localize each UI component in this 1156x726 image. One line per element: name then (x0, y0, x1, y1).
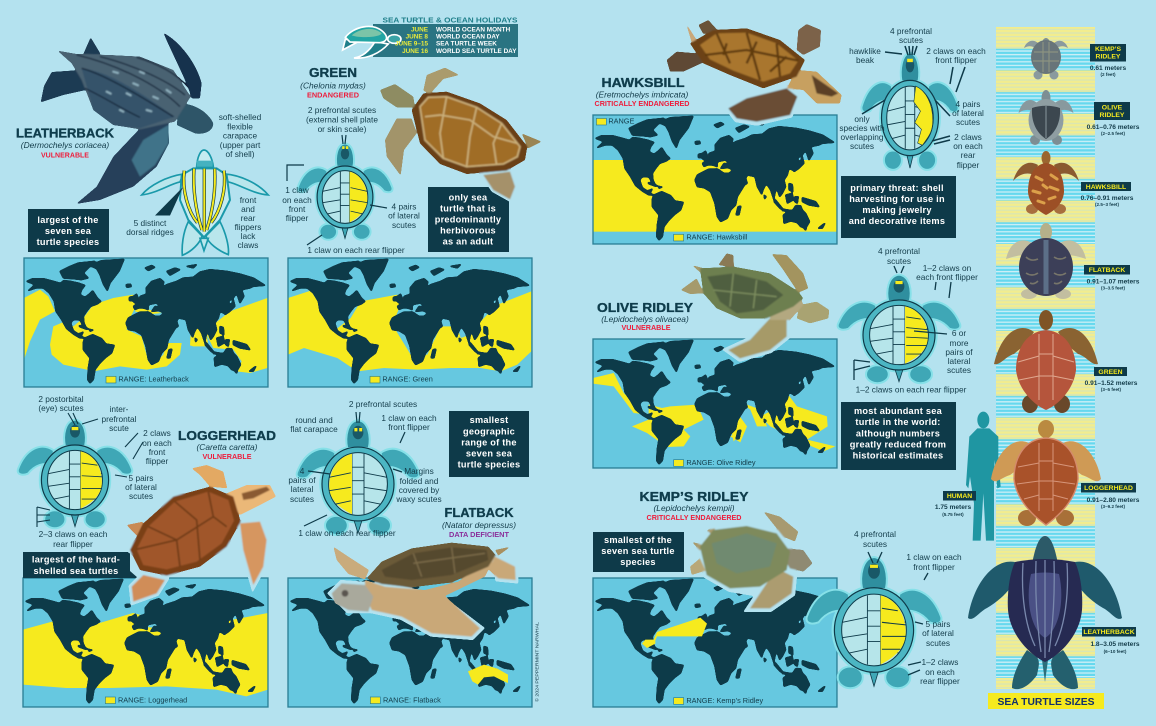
olive ridley range map: RANGE: Olive Ridley (686, 458, 756, 467)
hawksbill range map (593, 115, 837, 244)
dorsal ridges label: 5 distinct (134, 218, 167, 228)
lateral label: 4 pairs (956, 99, 980, 109)
overlapping scutes label: scutes (850, 141, 874, 151)
green anatomy diagram (297, 143, 393, 240)
loggerhead anatomy diagram (18, 420, 132, 528)
loggerhead turtle illustration (127, 465, 276, 602)
panel: green (282, 65, 542, 387)
olive ridley callout: although numbers (856, 428, 940, 438)
holidays title: SEA TURTLE & OCEAN HOLIDAYS (382, 16, 518, 24)
hawksbill range map: RANGE (608, 117, 635, 126)
panel: loggerhead (18, 394, 276, 707)
olive ridley turtle illustration (681, 253, 829, 358)
kemp's ridley range map (593, 578, 837, 707)
green callout: herbivorous (440, 226, 496, 236)
kemp's ridley turtle illustration (690, 512, 813, 608)
green heading: GREEN (309, 65, 357, 80)
front claw label: flipper (286, 213, 309, 223)
label: hawksbill: HAWKSBILL (1086, 184, 1126, 191)
panel: flatback (288, 399, 540, 707)
front claw label: 1 claw (285, 185, 310, 195)
flippers lack claws label: and (241, 204, 255, 214)
label: olive ridley: RIDLEY (1100, 112, 1125, 119)
olive ridley heading: OLIVE RIDLEY (597, 300, 693, 315)
label: leatherback: 1.8–3.05 meters (1090, 641, 1140, 648)
overlapping scutes label: species with (839, 123, 885, 133)
kemp's ridley anatomy diagram (807, 557, 941, 688)
label: olive ridley: OLIVE (1102, 104, 1123, 112)
olive ridley callout (841, 402, 956, 470)
flatback callout: turtle species (458, 460, 520, 470)
leatherback callout: largest of the (37, 215, 99, 225)
rear claws label: 2 claws (954, 132, 982, 142)
rear claws label: on each (953, 141, 983, 151)
green callout (428, 187, 509, 252)
flatback range map: RANGE: Flatback (383, 695, 441, 704)
hawksbill range map: RANGE: Hawksbill (686, 233, 748, 242)
green species name: (Chelonia mydas) (300, 80, 366, 90)
striped size scale (996, 27, 1095, 689)
front claw label: front flipper (913, 562, 955, 572)
size: hawksbill turtle (1013, 151, 1079, 215)
dorsal ridges label: dorsal ridges (126, 227, 174, 237)
prefrontal label: 4 prefrontal (878, 246, 920, 256)
loggerhead species name: (Caretta caretta) (197, 442, 258, 452)
size: kemp's ridley turtle (1024, 38, 1068, 80)
green callout: only sea (449, 192, 488, 202)
hawksbill anatomy diagram (861, 53, 959, 170)
label: kemp's ridley: 0.61 meters (1090, 65, 1126, 72)
hawksbill turtle illustration (667, 20, 842, 123)
postorbital scutes label: 2 postorbital (38, 394, 84, 404)
lateral scutes label: scutes (392, 220, 416, 230)
loggerhead range map: RANGE: Loggerhead (118, 695, 187, 704)
lateral label: 6 or (952, 328, 966, 338)
leatherback heading: LEATHERBACK (16, 126, 115, 140)
hawksbill callout (841, 176, 956, 238)
hawksbill species name: (Eretmochelys imbricata) (596, 90, 689, 100)
size: olive ridley turtle (1018, 90, 1074, 145)
label: loggerhead (1081, 483, 1140, 509)
beak label: hawklike (849, 46, 881, 56)
hawksbill callout: and decorative items (849, 216, 945, 226)
panel: hawksbill (593, 20, 986, 244)
beak label: beak (856, 55, 875, 65)
lateral scutes label: scutes (290, 494, 314, 504)
flatback callout: range of the (461, 438, 517, 448)
olive ridley callout: historical estimates (853, 450, 943, 460)
holidays banner (343, 16, 518, 58)
holiday dates (395, 26, 429, 55)
label: loggerhead: (3–9.2 feet) (1101, 504, 1125, 509)
carapace label: round and (295, 415, 333, 425)
front claws label: front flipper (935, 55, 977, 65)
rear claws label: 1–2 claws on each rear flipper (856, 384, 967, 394)
holiday names: WORLD SEA TURTLE DAY (436, 48, 517, 55)
leatherback carapace label: soft-shelled (219, 112, 262, 122)
size: green turtle (994, 310, 1098, 413)
label: olive ridley: (2–2.5 feet) (1101, 131, 1125, 136)
pointers: loggerhead diagram (37, 413, 143, 527)
copyright: © 2024 PEPPERMINT NARWHAL (534, 622, 540, 702)
kemp's ridley heading: KEMP’S RIDLEY (640, 489, 749, 504)
loggerhead status: VULNERABLE (202, 452, 252, 461)
lateral label: 5 pairs (926, 619, 950, 629)
flippers lack claws label: flippers (235, 222, 261, 232)
rear claws label: 2–3 claws on each (39, 529, 108, 539)
lateral label: of lateral (952, 108, 984, 118)
panel: sea turtle sizes (935, 27, 1140, 709)
label: flatback: FLATBACK (1089, 267, 1125, 274)
hawksbill status: CRITICALLY ENDANGERED (594, 99, 690, 108)
size: flatback turtle (1006, 223, 1086, 299)
label: kemp's ridley: KEMP’S (1095, 46, 1121, 53)
kemp's ridley range map: RANGE: Kemp’s Ridley (686, 696, 763, 705)
loggerhead callout: largest of the hard- (32, 554, 120, 564)
label: green: 0.91–1.52 meters (1085, 380, 1138, 387)
icon: teal turtle (343, 26, 401, 58)
label: leatherback: LEATHERBACK (1083, 629, 1135, 636)
label: hawksbill: (2.5–3 feet) (1095, 202, 1119, 207)
kemp's ridley callout: smallest of the (604, 535, 672, 545)
leatherback range map: RANGE: Leatherback (118, 375, 189, 384)
leatherback carapace label: flexible (227, 121, 253, 131)
kemp's ridley status: CRITICALLY ENDANGERED (646, 513, 742, 522)
olive ridley callout: greatly reduced from (850, 440, 946, 450)
interprefrontal scute label: prefrontal (101, 414, 137, 424)
label: human: 1.75 meters (935, 504, 971, 511)
lateral label: scutes (926, 638, 950, 648)
prefrontal label: scutes (863, 539, 887, 549)
sizes heading (988, 693, 1104, 709)
lateral scutes label: pairs of (288, 475, 316, 485)
holiday names: SEA TURTLE WEEK (436, 40, 497, 48)
front claws label: on each (142, 438, 172, 448)
front claws label: 2 claws on each (926, 46, 986, 56)
label: human: HUMAN (947, 493, 972, 500)
lateral label: of lateral (922, 628, 954, 638)
label: leatherback (1082, 627, 1140, 654)
front claws label: 1–2 claws on (923, 263, 972, 273)
leatherback callout: turtle species (37, 237, 99, 247)
panel: leatherback (16, 33, 268, 387)
lateral scutes label: 4 pairs (392, 202, 416, 212)
holiday dates: JUNE 9–15 (395, 40, 428, 48)
lateral scutes label: of lateral (125, 482, 157, 492)
flatback callout (449, 411, 529, 477)
lateral label: scutes (947, 365, 971, 375)
holiday names (436, 26, 517, 55)
prefrontal scutes label: or skin scale) (318, 124, 367, 134)
rear claw label: 1–2 claws (922, 657, 958, 667)
label: flatback: (3–3.5 feet) (1101, 286, 1125, 290)
label: green: GREEN (1098, 369, 1123, 376)
front claw label: 1 claw on each (381, 413, 437, 423)
flatback species name: (Natator depressus) (442, 520, 516, 530)
label: olive ridley: 0.61–0.76 meters (1087, 124, 1140, 131)
hawksbill callout: harvesting for use in (849, 194, 945, 204)
label: green: (3–5 feet) (1101, 387, 1122, 392)
panel: olive ridley (593, 246, 978, 470)
carapace label: flat carapace (290, 424, 338, 434)
prefrontal scutes label: 2 prefrontal scutes (308, 105, 376, 115)
lateral scutes label: 5 pairs (129, 473, 153, 483)
front claw label: front flipper (388, 422, 430, 432)
holiday names: WORLD OCEAN DAY (436, 34, 500, 40)
rear claw label: 1 claw on each rear flipper (307, 245, 405, 255)
green range map (288, 258, 532, 387)
leatherback carapace label: carapace (223, 130, 257, 140)
label: hawksbill: 0.76–0.91 meters (1081, 195, 1134, 202)
label: loggerhead: 0.91–2.80 meters (1087, 497, 1140, 504)
leatherback callout: seven sea (45, 226, 92, 236)
holiday dates: JUNE 8 (406, 34, 428, 40)
flatback callout: geographic (463, 426, 515, 436)
leatherback turtle illustration (41, 33, 213, 204)
size: leatherback turtle (968, 536, 1122, 689)
prefrontal label: 2 prefrontal scutes (349, 399, 417, 409)
flatback turtle illustration (332, 543, 516, 637)
margins label: waxy scutes (395, 494, 442, 504)
loggerhead callout: shelled sea turtles (34, 566, 118, 576)
green range map: RANGE: Green (382, 375, 433, 384)
pointers: green diagram (287, 135, 387, 245)
hawksbill callout: making jewelry (862, 205, 932, 215)
sizes heading: SEA TURTLE SIZES (998, 696, 1094, 708)
prefrontal label: 4 prefrontal (854, 529, 896, 539)
kemp's ridley callout: species (620, 557, 656, 567)
lateral label: pairs of (945, 347, 973, 357)
overlapping scutes label: overlapping (841, 132, 884, 142)
label: human: (5.75 feet) (942, 512, 964, 517)
front claws label: flipper (146, 456, 169, 466)
pointers: kemp diagram (868, 552, 928, 675)
green turtle illustration (380, 68, 542, 199)
pointers: flatback diagram (304, 412, 405, 526)
lateral scutes label: 4 (300, 466, 305, 476)
panel: kemp's ridley (593, 489, 962, 707)
olive ridley callout: turtle in the world: (855, 417, 941, 427)
leatherback species name: (Dermochelys coriacea) (21, 140, 109, 150)
flippers lack claws label: rear (241, 213, 256, 223)
prefrontal scutes label: (external shell plate (306, 114, 378, 124)
olive ridley range map (593, 339, 837, 468)
pointers: hawksbill diagram (862, 46, 965, 144)
pointers: olive diagram (854, 266, 951, 380)
size: loggerhead turtle (991, 420, 1101, 526)
hawksbill heading: HAWKSBILL (602, 75, 685, 90)
lateral scutes label: scutes (129, 491, 153, 501)
flatback range map (288, 578, 532, 707)
lateral label: scutes (956, 117, 980, 127)
olive ridley callout: most abundant sea (854, 406, 943, 416)
flatback callout: seven sea (466, 448, 513, 458)
leatherback carapace label: of shell) (225, 149, 255, 159)
label: hawksbill (1081, 182, 1134, 207)
rear claws label: rear (961, 150, 976, 160)
lateral scutes label: lateral (291, 484, 313, 494)
front claw label: on each (282, 195, 312, 205)
lateral label: lateral (948, 356, 970, 366)
front claws label: 2 claws (143, 428, 171, 438)
lateral scutes label: of lateral (388, 210, 420, 220)
leatherback range map (24, 258, 268, 387)
green callout: predominantly (435, 214, 502, 224)
prefrontal label: scutes (887, 256, 911, 266)
flatback anatomy diagram (297, 420, 419, 535)
holiday dates: JUNE (411, 26, 429, 34)
label: loggerhead: LOGGERHEAD (1084, 485, 1133, 492)
leatherback anatomy diagram (142, 150, 268, 255)
front claws label: each front flipper (916, 272, 978, 282)
kemp's ridley callout: seven sea turtle (601, 546, 675, 556)
label: flatback (1084, 265, 1140, 290)
flatback heading: FLATBACK (444, 505, 514, 520)
prefrontal label: 4 prefrontal (890, 26, 932, 36)
hawksbill callout: primary threat: shell (850, 183, 944, 193)
rear claw label: 1 claw on each rear flipper (298, 528, 396, 538)
olive ridley species name: (Lepidochelys olivacea) (601, 314, 689, 324)
prefrontal label: scutes (899, 35, 923, 45)
label: olive ridley (1087, 102, 1140, 136)
holiday dates: JUNE 16 (402, 48, 428, 55)
flippers lack claws label: claws (238, 240, 258, 250)
label: green (1085, 367, 1138, 392)
pointer: dorsal ridges (155, 187, 183, 216)
rear claw label: rear flipper (920, 676, 960, 686)
human silhouette (966, 412, 1001, 541)
interprefrontal scute label: inter- (110, 404, 129, 414)
loggerhead heading: LOGGERHEAD (178, 428, 276, 443)
rear claws label: flipper (957, 160, 980, 170)
label: kemp's ridley: RIDLEY (1096, 54, 1121, 60)
loggerhead callout (23, 552, 138, 578)
olive ridley anatomy diagram (838, 275, 960, 383)
flatback callout: smallest (470, 415, 508, 425)
overlapping scutes label: only (854, 114, 870, 124)
green status: ENDANGERED (307, 90, 360, 100)
label: kemp's ridley (1090, 44, 1126, 77)
rear claws label: rear flipper (53, 539, 93, 549)
kemp's ridley species name: (Lepidochelys kempii) (654, 503, 735, 513)
holiday names: WORLD OCEAN MONTH (436, 26, 511, 34)
margins label: Margins (404, 466, 434, 476)
margins label: folded and (400, 476, 439, 486)
front claws label: front (149, 447, 166, 457)
interprefrontal scute label: scute (109, 423, 129, 433)
postorbital scutes label: (eye) scutes (38, 403, 84, 413)
lateral label: more (950, 338, 969, 348)
holidays panel (373, 24, 518, 57)
flatback status: DATA DEFICIENT (449, 530, 509, 539)
front claw label: 1 claw on each (906, 552, 962, 562)
green callout: as an adult (443, 236, 493, 246)
leatherback carapace label: (upper part (220, 140, 261, 150)
leatherback callout (28, 209, 109, 252)
leatherback status: VULNERABLE (41, 150, 89, 160)
flippers lack claws label: front (240, 195, 257, 205)
label: kemp's ridley: (2 feet) (1100, 72, 1116, 77)
label: human (935, 491, 976, 517)
flippers lack claws label: lack (241, 231, 256, 241)
front claw label: front (289, 204, 306, 214)
kemp's ridley callout (593, 532, 684, 572)
olive ridley status: VULNERABLE (622, 323, 671, 332)
loggerhead range map (23, 578, 268, 707)
label: flatback: 0.91–1.07 meters (1087, 278, 1140, 286)
rear claw label: on each (925, 667, 955, 677)
margins label: covered by (399, 485, 440, 495)
green callout: turtle that is (440, 204, 496, 214)
label: leatherback: (6–10 feet) (1104, 649, 1127, 654)
